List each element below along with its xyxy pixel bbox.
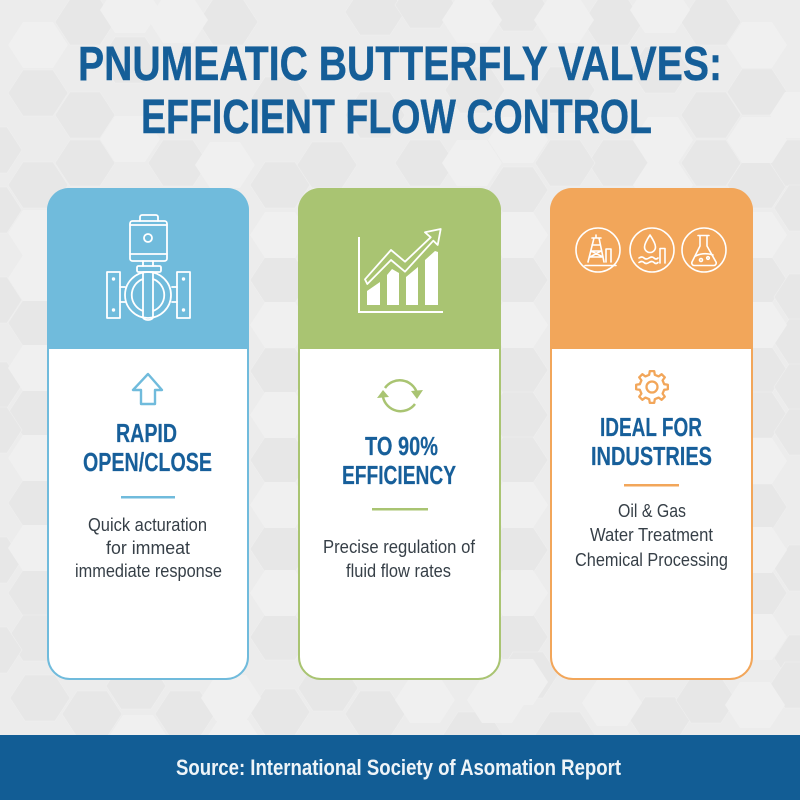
heading: rapid open/close	[83, 420, 212, 477]
panel: industries	[550, 188, 753, 679]
text: rapid description: for immeat	[106, 538, 190, 558]
title	[78, 37, 722, 144]
text: industries list: Oil & Gas	[618, 501, 686, 521]
blue card header	[47, 188, 249, 349]
icon: water treatment	[630, 228, 674, 272]
orange card header	[550, 188, 753, 349]
text: rapid description	[75, 515, 222, 581]
icon: chemical flask	[682, 228, 726, 272]
footer band	[0, 735, 800, 800]
heading: rapid open/close: RAPID	[116, 420, 177, 448]
icon: gear	[636, 371, 668, 403]
text: industries list: Chemical Processing	[575, 550, 728, 570]
source text: Source: International Society of Asomation Report	[176, 755, 622, 780]
text: efficiency description: Precise regulation of	[323, 537, 476, 557]
text: industries list: Water Treatment	[590, 525, 713, 545]
text: industries list	[575, 501, 728, 570]
icon: refresh cycle	[377, 380, 423, 411]
heading: rapid open/close: OPEN/CLOSE	[83, 449, 212, 477]
text: rapid description: Quick acturation	[88, 515, 207, 535]
title: EFFICIENT FLOW CONTROL	[141, 90, 652, 144]
heading: ideal for industries	[591, 414, 712, 471]
icon: butterfly valve	[107, 215, 190, 320]
text: rapid description: immediate response	[75, 561, 222, 581]
panel: efficiency	[298, 188, 501, 679]
text: efficiency description	[323, 537, 476, 581]
heading: ideal for industries: INDUSTRIES	[591, 443, 712, 471]
heading: to 90% efficiency: TO 90%	[365, 433, 438, 461]
heading: ideal for industries: IDEAL FOR	[600, 414, 702, 442]
heading: to 90% efficiency	[342, 433, 456, 490]
panel: rapid open/close	[47, 188, 249, 679]
heading: to 90% efficiency: EFFICIENCY	[342, 462, 456, 490]
icon: rising bar chart	[359, 229, 443, 312]
icon: up arrow	[133, 374, 162, 404]
green card header	[298, 188, 501, 349]
text: efficiency description: fluid flow rates	[346, 561, 451, 581]
icon: oil rig	[576, 228, 620, 272]
